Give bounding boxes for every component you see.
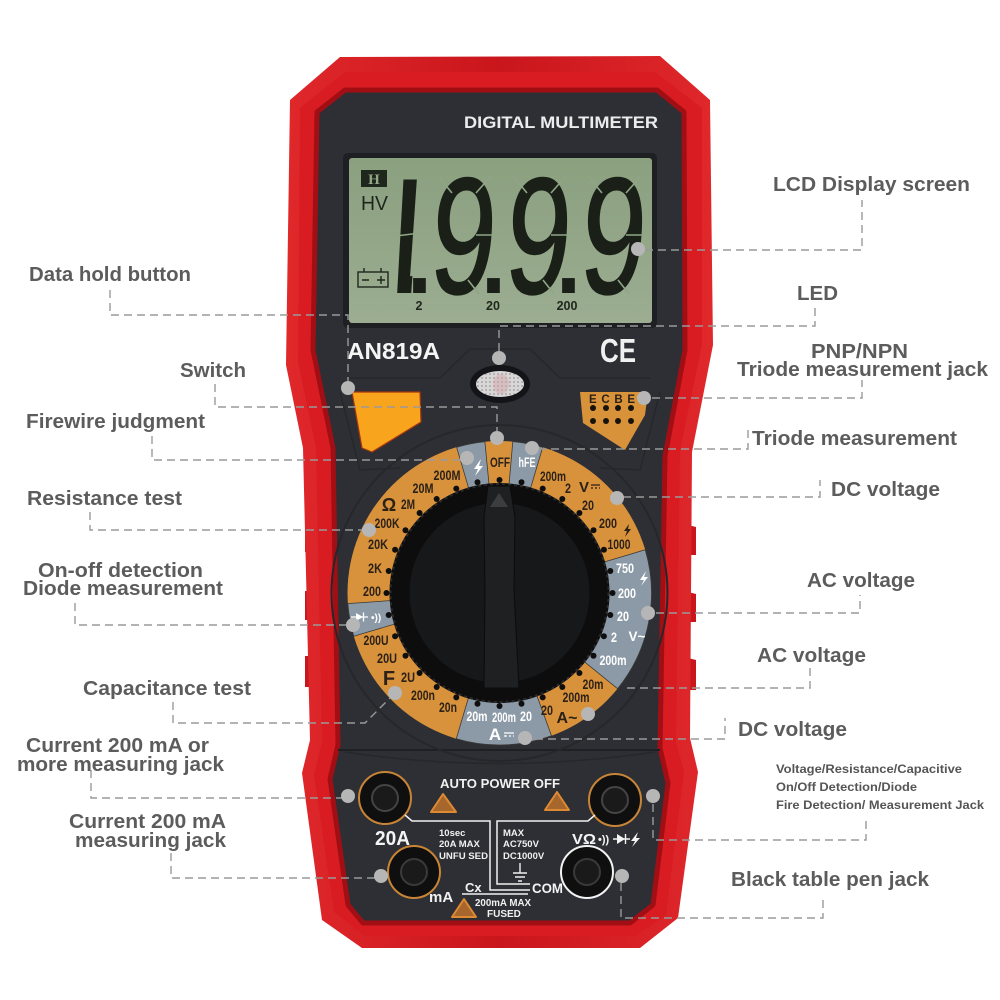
right callout labels [731, 174, 989, 891]
AC voltage range: 200 [618, 586, 636, 601]
AC voltage range [600, 561, 648, 668]
DC voltage range: 20 [582, 498, 594, 513]
LCD reading 1.999: 9 [425, 145, 503, 329]
multimeter body [286, 56, 713, 948]
AC voltage range: V~ [629, 629, 646, 644]
LCD reading 1.999: 9 [575, 145, 653, 329]
rotary dial scale [332, 425, 668, 761]
DC current range: 20m [466, 709, 488, 724]
resistance range: 200 [363, 584, 381, 599]
panel text: AC750V [503, 839, 540, 850]
resistance range [363, 468, 460, 599]
DC voltage range [540, 469, 631, 552]
AC voltage range: 20 [617, 609, 629, 624]
yellow data hold button [352, 392, 421, 452]
socket letters: ECBE [589, 394, 635, 406]
hFE OFF and continuity positions [474, 455, 536, 476]
panel text: MAX [503, 828, 525, 839]
left callout labels: On-off detection [38, 560, 203, 582]
left callout labels [17, 264, 251, 852]
LCD reading 1.999: 9 [500, 145, 578, 329]
AC voltage range: 2 [611, 630, 617, 645]
LCD reading 1.999: 1 [368, 145, 438, 329]
jack wiring lines [405, 815, 595, 894]
resistance range: 200M [434, 468, 460, 483]
CE mark: CE [600, 332, 636, 369]
DC current range: 20 [520, 709, 532, 724]
panel text: COM [532, 880, 563, 896]
hFE OFF and continuity positions: hFE [518, 455, 536, 470]
red outer housing [286, 56, 713, 948]
diode symbols: •)) [371, 613, 381, 624]
right callout labels: LCD Display screen [773, 174, 970, 196]
range marks: 200 [557, 299, 577, 313]
capacitance range: 200U [364, 633, 388, 648]
capacitance range [364, 633, 457, 715]
socket holes [590, 405, 634, 424]
capacitance range: F [383, 668, 395, 690]
input jacks [359, 772, 641, 898]
AC current range: 200m [562, 690, 590, 705]
knob pointer [484, 486, 519, 688]
right callout labels: Black table pen jack [731, 869, 930, 891]
DC current range [466, 709, 532, 744]
right callout labels: Triode measurement jack [737, 359, 989, 381]
left callout labels: Current 200 mA [69, 811, 226, 833]
icon: battery [358, 268, 388, 287]
panel text: 20A [375, 828, 410, 850]
left callout labels: Current 200 mA or [26, 735, 209, 757]
panel text: 10sec [439, 828, 465, 839]
capacitance range: 20n [439, 700, 457, 715]
diode symbols [351, 612, 381, 624]
panel text: AUTO POWER OFF [440, 776, 560, 791]
LCD bezel [343, 153, 657, 328]
AC current range: 20 [541, 703, 553, 718]
right callout labels: DC voltage [738, 719, 847, 741]
icon: hold indicator: H [368, 172, 380, 188]
bezel contours [340, 349, 660, 764]
jack COM [561, 846, 613, 898]
dark front panel [313, 90, 685, 923]
left callout labels: Switch [180, 360, 246, 382]
LCD reading 1.999: . [407, 204, 432, 315]
left callout labels: Capacitance test [83, 678, 251, 700]
LCD reading 1.999 [397, 176, 642, 296]
icon: diode and bolt on V jack [613, 832, 640, 847]
AC voltage range: 200m [600, 653, 626, 668]
resistance range: 2K [368, 561, 382, 576]
panel text: •)) [598, 834, 610, 846]
right callout labels: On/Off Detection/Diode [776, 780, 917, 794]
right callout labels: LED [797, 283, 838, 305]
capacitance range: 20U [377, 651, 397, 666]
capacitance range: 2U [401, 670, 415, 685]
jack mA [388, 846, 440, 898]
DC voltage range: 200m [540, 469, 566, 484]
resistance range: 200K [374, 516, 400, 531]
icon: hold indicator [361, 170, 387, 188]
range marks: 20 [486, 299, 500, 313]
LED lamp [470, 365, 530, 403]
jack 20A [359, 772, 411, 824]
DC current range: A [489, 725, 501, 744]
callout markers [341, 242, 660, 883]
right callout labels: PNP/NPN [811, 341, 908, 363]
panel text: UNFU SED [439, 851, 488, 862]
AC current range [541, 677, 604, 727]
left callout labels: Firewire judgment [26, 411, 205, 433]
resistance range: 20M [412, 481, 434, 496]
selector contact dots [384, 477, 616, 709]
panel text: FUSED [487, 909, 521, 920]
right callout labels: Fire Detection/ Measurement Jack [776, 798, 984, 812]
panel text: VΩ [572, 831, 596, 848]
panel text: mA [429, 889, 453, 906]
leader lines [75, 200, 866, 918]
DC voltage range: 1000 [608, 537, 630, 552]
hFE OFF and continuity positions: OFF [490, 455, 510, 470]
panel text [375, 776, 610, 920]
icon: ground [513, 863, 527, 881]
right callout labels: AC voltage [807, 570, 915, 592]
model name: AN819A [347, 338, 440, 364]
left callout labels: Data hold button [29, 264, 191, 286]
left callout labels: Diode measurement [23, 578, 223, 600]
range marks: 2 [416, 299, 423, 313]
range marks [416, 299, 577, 313]
selector knob [390, 483, 610, 703]
panel text: 200mA MAX [475, 898, 531, 909]
panel text: Cx [465, 880, 482, 895]
DC current range: 200m [492, 710, 516, 725]
knob arrow [490, 493, 508, 507]
HV indicator: HV [361, 193, 389, 215]
right callout labels: AC voltage [757, 645, 866, 667]
LCD reading 1.999: . [556, 204, 581, 315]
left callout labels: more measuring jack [17, 754, 225, 776]
resistance range: Ω [382, 495, 396, 515]
title: digital multimeter: DIGITAL MULTIMETER [464, 113, 658, 132]
right callout labels: Voltage/Resistance/Capacitive [776, 762, 962, 776]
LCD reading 1.999: . [481, 204, 506, 315]
capacitance range: 200n [411, 688, 435, 703]
right callout labels: Triode measurement [752, 428, 957, 450]
transistor socket [580, 392, 648, 450]
jack V ohm [589, 774, 641, 826]
AC current range: A~ [557, 710, 577, 727]
DC voltage range: 200 [599, 516, 617, 531]
resistance range: 2M [401, 497, 415, 512]
warning triangles [431, 792, 569, 917]
right callout labels: DC voltage [831, 479, 940, 501]
lower panel divider [338, 749, 660, 751]
panel text: 20A MAX [439, 839, 480, 850]
DC voltage range: V [579, 479, 589, 496]
DC voltage range: 2 [565, 481, 571, 496]
AC current range: 20m [582, 677, 604, 692]
left callout labels: measuring jack [75, 830, 227, 852]
LCD screen [349, 158, 652, 323]
AC voltage range: 750 [616, 561, 634, 576]
resistance range: 20K [368, 537, 388, 552]
panel text: DC1000V [503, 851, 545, 862]
left callout labels: Resistance test [27, 488, 182, 510]
